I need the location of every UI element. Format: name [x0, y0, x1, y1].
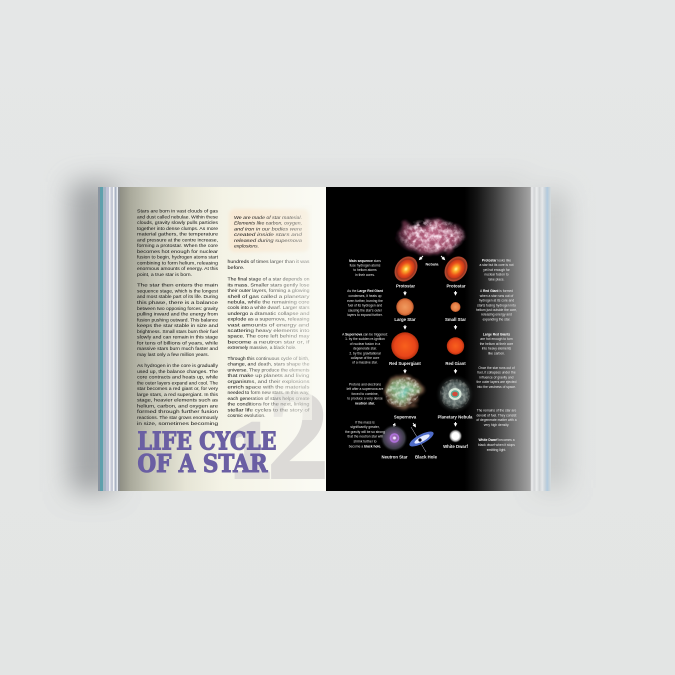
- note: red giant: when a star runs out of: [480, 294, 513, 298]
- callout: quote: and iron in our bodies were: [234, 226, 302, 232]
- text block: paragraph 2: sequence stage, which is the longest: [137, 288, 219, 294]
- text block: continuous cycle: universe. They produce the elements: [228, 367, 310, 373]
- right page edges: [530, 187, 551, 491]
- callout: quote: created inside stars and: [234, 232, 302, 238]
- text block: continuous cycle: each generation of stars helps create: [228, 396, 310, 402]
- callout: quote: [229, 209, 309, 252]
- text block: paragraph 1: becomes hot enough for nuclear: [137, 249, 218, 255]
- note: large red giants: like carbon.: [488, 351, 505, 355]
- title: OF A STAR: [138, 449, 268, 478]
- text block: final stage: their outer layers, forming a glowing: [228, 288, 310, 294]
- note: neutron star: neutron star.: [355, 401, 375, 405]
- text block: continuation: [228, 259, 310, 271]
- text block: paragraph 2: [137, 283, 219, 358]
- text block: paragraph 3: stage, heavier elements such as: [137, 398, 219, 404]
- text block: paragraph 2: this phase, there is a balance: [137, 300, 218, 306]
- open book: [98, 187, 551, 505]
- label: protostar left: Protostar: [396, 284, 415, 288]
- note: main sequence: stars: [374, 259, 381, 263]
- text block: paragraph 2: brightness. Small stars burn their fuel: [137, 329, 218, 335]
- note: protostar: yet hot enough for: [483, 268, 511, 272]
- label: black hole: Black Hole: [415, 454, 438, 460]
- text block: paragraph 3: reactions. The star grows enormously: [137, 415, 219, 421]
- note: large red giant: even further, burning the: [347, 299, 383, 303]
- arrows: protostar to stars: [405, 291, 456, 294]
- callout: quote: released during supernova: [234, 238, 302, 244]
- label: red giant: Red Giant: [445, 361, 466, 366]
- book shadow: [70, 180, 566, 492]
- text block: continuous cycle: stellar life cycles to the story of: [228, 407, 310, 413]
- text block: final stage: extremely massive, a black hole.: [228, 345, 296, 351]
- text block: final stage: its mass. Smaller stars gently lose: [228, 282, 310, 288]
- note: star runs out of fuel: the outer layers are ejected: [477, 380, 517, 384]
- text block: continuation: before.: [228, 265, 244, 271]
- arrows: nebula to protostars: [420, 256, 444, 259]
- text block: paragraph 3: used up, the balance changes. The: [137, 369, 218, 375]
- text block: paragraph 3: in size, sometimes becoming: [137, 421, 218, 427]
- note: star runs out of fuel: influence of gravity and: [480, 375, 514, 379]
- text block: continuous cycle: organisms, and their explosions: [228, 379, 310, 385]
- title: [138, 426, 276, 478]
- text block: paragraph 1: [137, 208, 219, 278]
- watermark number: 1: [230, 407, 272, 495]
- note: large red giant: layers to expand further.: [347, 313, 383, 317]
- text block: continuous cycle: Through this continuous cycle of birth,: [228, 356, 310, 362]
- note: protostar: nuclear fusion to: [484, 273, 509, 277]
- note: supernova: 1. by the sudden re-ignition: [345, 337, 385, 341]
- text block: paragraph 1: combining to form helium, releasing: [137, 260, 218, 266]
- note: red giant: hydrogen at its core and: [479, 299, 514, 303]
- text block: paragraph 2: slowly and can remain in this stage: [137, 335, 218, 341]
- note: protostar: Protostar looks like: [482, 258, 511, 262]
- text block: paragraph 3: [137, 363, 219, 427]
- label: supernova: Supernova: [394, 414, 417, 420]
- note: neutron star: Protons and electrons: [349, 382, 381, 386]
- text block: paragraph 1: and pressure at the centre increase,: [137, 237, 218, 243]
- text block: continuous cycle: that make up planets and living: [228, 373, 310, 379]
- note: black hole: If the mass is: [355, 420, 375, 424]
- label: large star: Large Star: [394, 317, 416, 322]
- text block: final stage: nebula, while the remaining core: [228, 300, 310, 306]
- label: small star: Small Star: [445, 317, 466, 322]
- note: red giant: expanding the star.: [483, 317, 511, 321]
- note: large red giant: condenses, it heats up: [348, 294, 382, 298]
- note: star runs out of fuel: Once the star runs out of: [478, 366, 515, 370]
- text block: final stage: [228, 277, 310, 351]
- note: large red giants: the helium at their core: [480, 342, 513, 346]
- note: supernova: A Supernova can be triggered:: [342, 332, 388, 336]
- note: white dwarf: emitting light.: [487, 448, 506, 452]
- label: neutron star: Neutron Star: [381, 454, 408, 460]
- text block: continuous cycle: change, and death, stars shape the: [228, 362, 310, 368]
- icon: black hole: [407, 427, 436, 452]
- note: large red giant: causing the star's outer: [348, 308, 383, 312]
- text block: continuous cycle: cosmic evolution.: [228, 413, 266, 419]
- note: remains of the star: devoid of fuel. They consist: [477, 413, 517, 417]
- note: main sequence: in their cores.: [355, 273, 375, 277]
- note: neutron star: forced to combine,: [351, 392, 379, 396]
- note: neutron star: left after a supernova are: [347, 387, 383, 391]
- note: large red giant: As the Large Red Giant: [347, 289, 383, 293]
- text block: final stage: explode as a supernova, releasing: [228, 317, 310, 323]
- text block: paragraph 1: enormous amounts of energy. At this: [137, 266, 219, 272]
- text block: continuous cycle: enrich space with the materials: [228, 384, 310, 390]
- icon: planetary nebula: [436, 375, 474, 413]
- arrows: giants to explosions: [405, 369, 456, 372]
- note: black hole: significantly greater,: [350, 425, 380, 429]
- note: black hole: become a black hole.: [349, 444, 381, 448]
- arrows: to remnants: [394, 422, 456, 426]
- text block: continuous cycle: needed to form new stars. In this way,: [228, 390, 310, 396]
- note: supernova: degenerate star.: [353, 347, 377, 351]
- text block: paragraph 1: forming a protostar. When the core: [137, 243, 218, 249]
- text block: paragraph 2: between two opposing forces: gravity: [137, 306, 219, 312]
- text block: paragraph 3: core contracts and heats up, while: [137, 375, 218, 381]
- note: main sequence: Main sequence: [349, 259, 373, 263]
- icon: supernova: [376, 367, 430, 417]
- note: large red giants: Large Red Giants: [483, 332, 510, 336]
- text block: continuation: hundreds of times larger than it was: [228, 259, 310, 265]
- note: supernova: 2. by the gravitational: [349, 351, 381, 355]
- label: nebula: Nebula: [426, 262, 439, 266]
- icon: nebula: [395, 218, 469, 256]
- callout: quote: Elements like carbon, oxygen,: [234, 221, 302, 227]
- text block: paragraph 3: helium, carbon, and oxygen are: [137, 403, 218, 409]
- text block: final stage: undergo a dramatic collapse and: [228, 311, 310, 317]
- note: protostar: a star but its core is not: [479, 263, 514, 267]
- text block: paragraph 1: material gathers, the temperature: [137, 232, 218, 238]
- text block: paragraph 3: large stars, a red supergiant. In this: [137, 392, 219, 398]
- arrows: stars to giants: [405, 325, 456, 328]
- note: white dwarf: White Dwarf becomes a: [478, 438, 515, 442]
- text block: paragraph 1: Stars are born in vast clouds of gas: [137, 208, 219, 214]
- note: large red giants: are hot enough to turn: [480, 337, 513, 341]
- text block: paragraph 2: massive stars burn much faster and: [137, 346, 218, 352]
- icon: small star: [450, 302, 460, 312]
- note: red giant: helium just outside the core,: [476, 308, 517, 312]
- icon: protostar left: [390, 252, 422, 286]
- text block: continuous cycle: the conditions for the next, linking: [228, 402, 310, 408]
- note: neutron star: to produce a very dense: [347, 397, 383, 401]
- note: star runs out of fuel: into the vastness of space.: [477, 385, 516, 389]
- note: supernova: collapse of the core: [351, 356, 379, 360]
- note: supernova: of a massive star.: [352, 361, 378, 365]
- note: red giant: releasing energy and: [481, 313, 512, 317]
- text block: final stage: The final stage of a star depends on: [228, 277, 310, 283]
- panel: left page: [120, 187, 326, 491]
- note: black hole: shrink further to: [354, 440, 377, 444]
- text block: continuous cycle: [228, 356, 310, 419]
- text block: paragraph 2: The star then enters the main: [137, 283, 218, 289]
- text block: paragraph 1: clouds, gravity slowly pulls particles: [137, 220, 219, 226]
- text block: final stage: vast amounts of energy and: [228, 322, 310, 328]
- note: main sequence: fuse hydrogen atoms: [350, 264, 381, 268]
- text block: paragraph 1: together into dense clumps. As more: [137, 226, 218, 232]
- watermark number: [234, 392, 325, 479]
- text block: paragraph 1: fusion to begin, hydrogen atoms start: [137, 255, 219, 261]
- note: supernova: of nuclear fusion in a: [350, 342, 380, 346]
- note: black hole: the gravity will be so strong: [345, 430, 385, 434]
- note: red giant: A Red Giant is formed: [480, 289, 513, 293]
- note: large red giants: into heavy elements: [482, 347, 512, 351]
- note: main sequence: to helium atoms: [353, 268, 377, 272]
- icon: neutron star: [380, 424, 408, 452]
- note: protostar: take place.: [489, 277, 505, 281]
- icon: large star: [396, 298, 414, 316]
- note: red giant: starts fusing hydrogen into: [477, 303, 516, 307]
- callout: quote: We are made of star material.: [234, 215, 302, 221]
- icon: white dwarf: [448, 429, 462, 443]
- text block: final stage: become a neutron star or, if: [228, 339, 310, 345]
- panel: right page: [326, 187, 530, 491]
- label: protostar right: Protostar: [446, 284, 466, 288]
- text block: final stage: shell of gas called a planetary: [228, 294, 310, 300]
- text block: paragraph 2: and most stable part of its life. During: [137, 294, 218, 300]
- text block: paragraph 2: keeps the star stable in size and: [137, 323, 218, 329]
- text block: final stage: cools into a white dwarf. Larger stars: [228, 305, 310, 311]
- note: white dwarf: black dwarf when it stops: [478, 443, 515, 447]
- note: star runs out of fuel: fuel, it collapses under the: [477, 371, 516, 375]
- text block: paragraph 1: and dust called nebulae. Within these: [137, 214, 218, 220]
- text block: paragraph 3: star becomes a red giant or, for very: [137, 386, 219, 392]
- text block: final stage: scattering heavy elements into: [228, 328, 310, 334]
- label: planetary nebula: Planetary Nebula: [438, 414, 473, 420]
- note: remains of the star: The remains of the star are: [477, 408, 516, 412]
- note: black hole: that the neutron star will: [347, 435, 383, 439]
- text block: paragraph 2: for tens of billions of years, while: [137, 340, 218, 346]
- icon: red supergiant: [391, 332, 419, 360]
- watermark number: 2: [268, 366, 328, 505]
- text block: paragraph 2: fusion pushing outward. This balance: [137, 317, 218, 323]
- icon: red giant: [447, 337, 464, 355]
- text block: final stage: space. The core left behind may: [228, 334, 310, 340]
- label: white dwarf: White Dwarf: [443, 444, 468, 449]
- text block: paragraph 2: may last only a few million years.: [137, 352, 209, 358]
- left page edges: [98, 187, 120, 491]
- text block: paragraph 2: pulling inward and the energy from: [137, 312, 218, 318]
- text block: paragraph 1: point, a true star is born.: [137, 272, 192, 278]
- note: large red giant: fuel of its hydrogen and: [348, 304, 382, 308]
- label: red supergiant: Red Supergiant: [389, 361, 421, 366]
- text block: paragraph 3: the outer layers expand and cool. The: [137, 380, 218, 386]
- text block: paragraph 3: formed through further fusion: [137, 409, 218, 415]
- text block: paragraph 3: As hydrogen in the core is gradually: [137, 363, 219, 369]
- note: remains of the star: very high density.: [484, 423, 509, 427]
- callout: quote: explosions.: [234, 244, 259, 250]
- note: remains of the star: of degenerate matter with a: [476, 418, 517, 422]
- title: LIFE CYCLE: [138, 426, 276, 455]
- icon: protostar right: [440, 252, 472, 286]
